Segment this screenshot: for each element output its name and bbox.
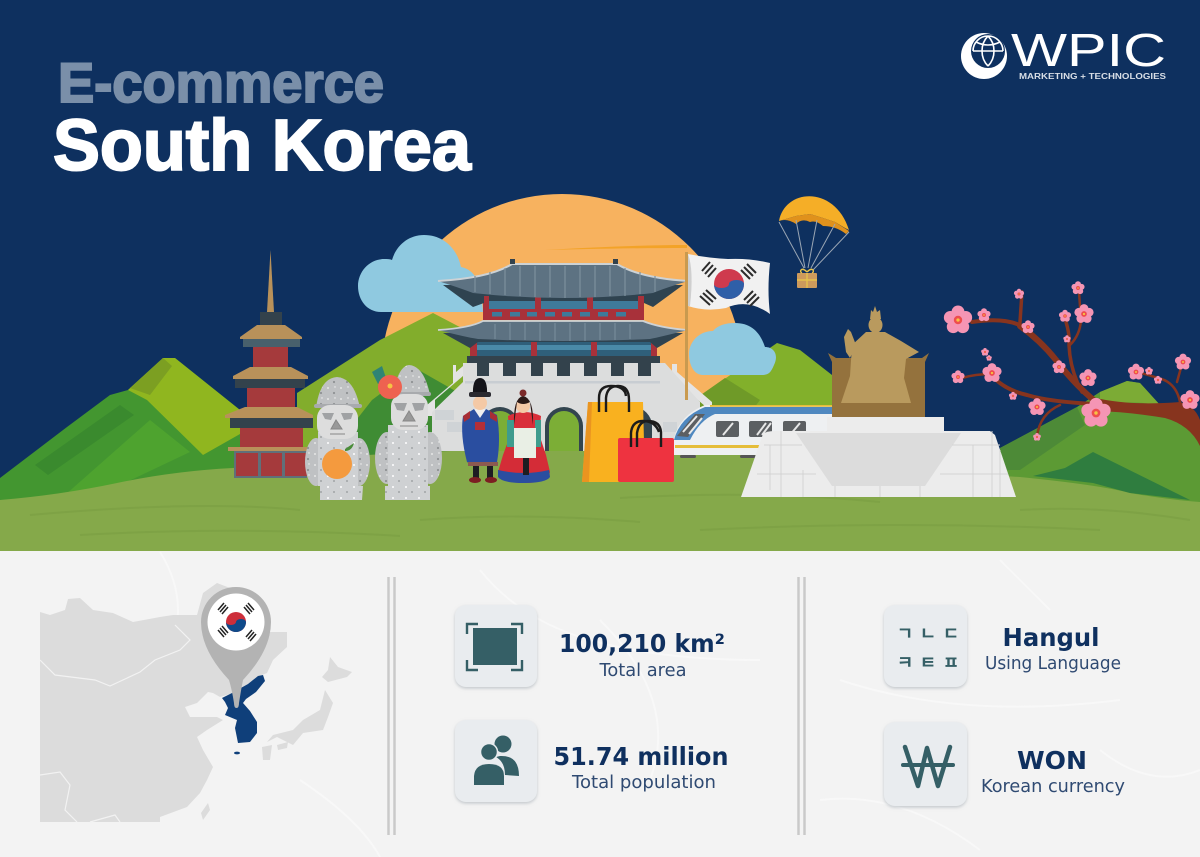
- stat: currency: [884, 722, 1125, 806]
- Japan: [262, 657, 352, 760]
- monument: King Sejong statue: [741, 306, 1016, 497]
- stone wall: [427, 363, 712, 451]
- sun: [381, 194, 743, 556]
- icon: globe: [961, 33, 1007, 79]
- logo: WPIC: [961, 24, 1167, 81]
- stat: total population: [455, 720, 728, 802]
- borders: [40, 625, 190, 822]
- palace gate: [427, 259, 712, 451]
- heading: South Korea: South Korea: [53, 106, 472, 186]
- panel: information section: [0, 551, 1200, 857]
- pagoda: [225, 250, 313, 478]
- arches: [545, 407, 583, 451]
- background: night sky: [0, 0, 1200, 551]
- wordmark: WPIC: [1011, 24, 1166, 76]
- upper storey: [483, 295, 644, 320]
- value: Hangul: [1002, 623, 1100, 652]
- label: Total population: [571, 772, 716, 793]
- value: WON: [1017, 746, 1087, 775]
- shopping bags: [582, 386, 674, 482]
- icon: hangul letters: ㄷ: [943, 620, 959, 646]
- map pin: [201, 587, 271, 708]
- icon: area frame: [455, 605, 537, 687]
- map: East Asia: [40, 583, 352, 822]
- value: 51.74 million: [554, 742, 728, 771]
- figure: [841, 306, 919, 403]
- label: Using Language: [985, 653, 1121, 674]
- heading: E-commerce: E-commerce: [58, 51, 384, 114]
- icon: hangul letters: ㄱ: [897, 620, 913, 646]
- pin flag taeguk: [226, 612, 246, 632]
- lower roof: [438, 321, 688, 348]
- flag pole: [685, 252, 688, 400]
- couple in hanbok: [462, 378, 550, 483]
- cloud right: [689, 323, 776, 375]
- dividers: [388, 577, 804, 835]
- hills background: [0, 313, 1200, 510]
- icon: hangul letters: ㅌ: [920, 649, 936, 675]
- Dol hareubang statue right: [372, 365, 442, 500]
- blossoms: [944, 281, 1200, 441]
- stat: total area: [455, 605, 725, 687]
- branches: [962, 292, 1182, 436]
- battlements: [467, 356, 660, 376]
- hill: dark foreground right: [1033, 452, 1190, 500]
- Taiwan: [201, 803, 210, 820]
- base: [741, 431, 1016, 497]
- yellow bag: [582, 386, 645, 482]
- taeguk: [714, 269, 744, 299]
- cloud left: [358, 235, 483, 312]
- ground: [0, 451, 1200, 551]
- woman: [498, 390, 550, 483]
- label: Korean currency: [981, 776, 1125, 797]
- cherry blossom branch: [944, 281, 1200, 446]
- throne: [828, 353, 929, 417]
- train: [674, 405, 835, 458]
- Korean peninsula: [222, 675, 265, 754]
- mainland: [40, 583, 287, 822]
- marble texture: [160, 552, 1200, 857]
- hibiscus flower: [372, 366, 402, 399]
- icon: hangul letters: [884, 605, 967, 687]
- parachute with gift: [779, 196, 849, 288]
- stat: language: [884, 605, 1121, 687]
- label: Total area: [599, 660, 686, 681]
- trigrams: [700, 262, 759, 306]
- tangerine: [322, 443, 354, 479]
- lower storey: [470, 339, 657, 356]
- upper roof: [438, 259, 688, 307]
- hill: centre: [297, 313, 480, 470]
- stair rails: [427, 365, 463, 416]
- train windows: [716, 421, 806, 437]
- flag: South Korea: [688, 254, 770, 314]
- red bag: [618, 421, 674, 482]
- hill: far right: [1000, 381, 1200, 510]
- hill: far left: [0, 358, 300, 510]
- icon: people: [455, 720, 537, 802]
- plinth: [827, 417, 944, 434]
- icon: won sign: [884, 722, 967, 806]
- man: [462, 378, 499, 483]
- value: 100,210 km²: [559, 629, 725, 658]
- spire: [267, 250, 274, 312]
- icon: hangul letters: ㅍ: [943, 649, 959, 675]
- hill: right of gate: [698, 343, 832, 470]
- title: [53, 51, 472, 186]
- icon: hangul letters: ㅋ: [897, 649, 913, 675]
- Dol hareubang statue left: [305, 377, 370, 500]
- icon: hangul letters: ㄴ: [920, 620, 936, 646]
- tagline: MARKETING + TECHNOLOGIES: [1019, 72, 1167, 81]
